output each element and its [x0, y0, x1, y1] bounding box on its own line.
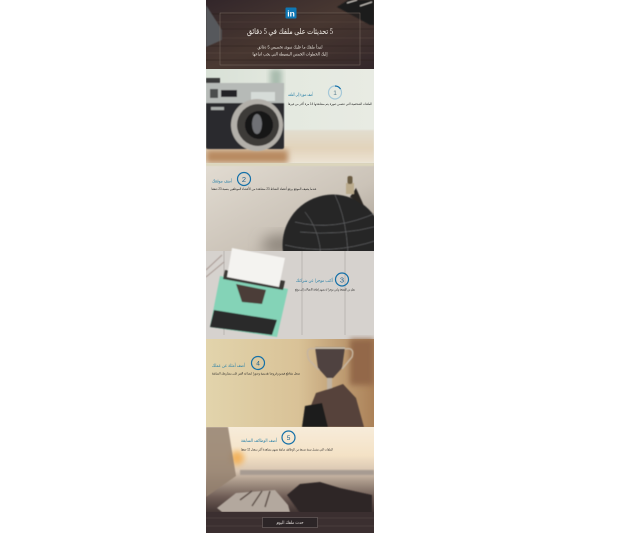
- callout: step 3: [295, 273, 355, 292]
- callout: step 1: [288, 86, 372, 106]
- icon: linkedin logo: [286, 8, 296, 18]
- step 3 text: نظم من الصفحة ولمن موجزا له يسهم إضافة الاتصالات إلى موقع: [295, 288, 355, 292]
- panel: step 3 typewriter: [206, 248, 374, 339]
- step 1 number: 1: [333, 90, 337, 97]
- panel: step 2 globe: [206, 163, 374, 251]
- step 5 heading: أضف الوظائف السابقة: [241, 437, 278, 443]
- icon: laptop and hands: [206, 427, 372, 513]
- step 4 number: 4: [256, 360, 260, 368]
- icon: trophy in hand: [302, 347, 364, 427]
- panel: step 4 trophy: [206, 339, 374, 427]
- step 4 text: سجل مقاطع فيديو وعروضا تقديمية وصورا لتساعد الغير على مشاريعك السابقة: [212, 372, 300, 376]
- step 2 text: عندما يضيف الموقع يرفع أعضاء النشاط 23 مشاهدة من الأعضاء الموظفين بنسبة 23 ضعفا: [211, 186, 317, 191]
- callout: step 4: [212, 356, 300, 376]
- step 4 heading: أضف أمثلة عن عملك: [212, 362, 246, 368]
- step 1 text: الملفات الشخصية التي تتضمن صورة يتم مشاهدتها 14 مرة أكثر من غيرها: [288, 101, 372, 106]
- intro text: [252, 44, 328, 58]
- panel: step 5 laptop: [206, 427, 374, 515]
- panel: step 1 camera: [206, 69, 374, 163]
- panel: footer: [206, 512, 374, 533]
- button: update profile: حدث ملفك اليوم: [276, 520, 304, 525]
- icon: laptop corner: [206, 5, 222, 47]
- step 3 number: 3: [340, 276, 344, 284]
- button: update profile: [262, 518, 318, 528]
- icon: typewriter: [206, 248, 288, 337]
- callout: step 5: [241, 431, 333, 452]
- step 3 heading: أكتب موجزا عن شركتك: [296, 277, 334, 283]
- icon: camera: [206, 78, 284, 151]
- step 2 number: 2: [242, 175, 246, 184]
- step 5 number: 5: [287, 435, 291, 442]
- step 5 text: الملفات التي تشمل سمة سمعة من الوظائف سابقة تسهم مشاهدة أكثر بمعدل 12 ضعفا: [241, 446, 333, 452]
- icon: globe: [257, 175, 374, 251]
- callout: step 2: [211, 172, 317, 191]
- icon: linkedin logo: in: [287, 8, 295, 18]
- intro text: إليك الخطوات الخمس البسيطة التي يجب اتباعها: [252, 52, 328, 58]
- intro text: لتبدأ ملفك ما عليك سوى تخصيص 5 دقائق: [258, 44, 322, 50]
- step 1 heading: أضف صورة إلى الملف: [288, 91, 313, 98]
- step 2 heading: أضف موقعك: [212, 178, 233, 184]
- icon: camera corner: [337, 0, 374, 25]
- panel: header: [206, 0, 374, 69]
- frame: [220, 13, 360, 65]
- title: 5 تحديثات على ملفك في 5 دقائق: [247, 27, 333, 36]
